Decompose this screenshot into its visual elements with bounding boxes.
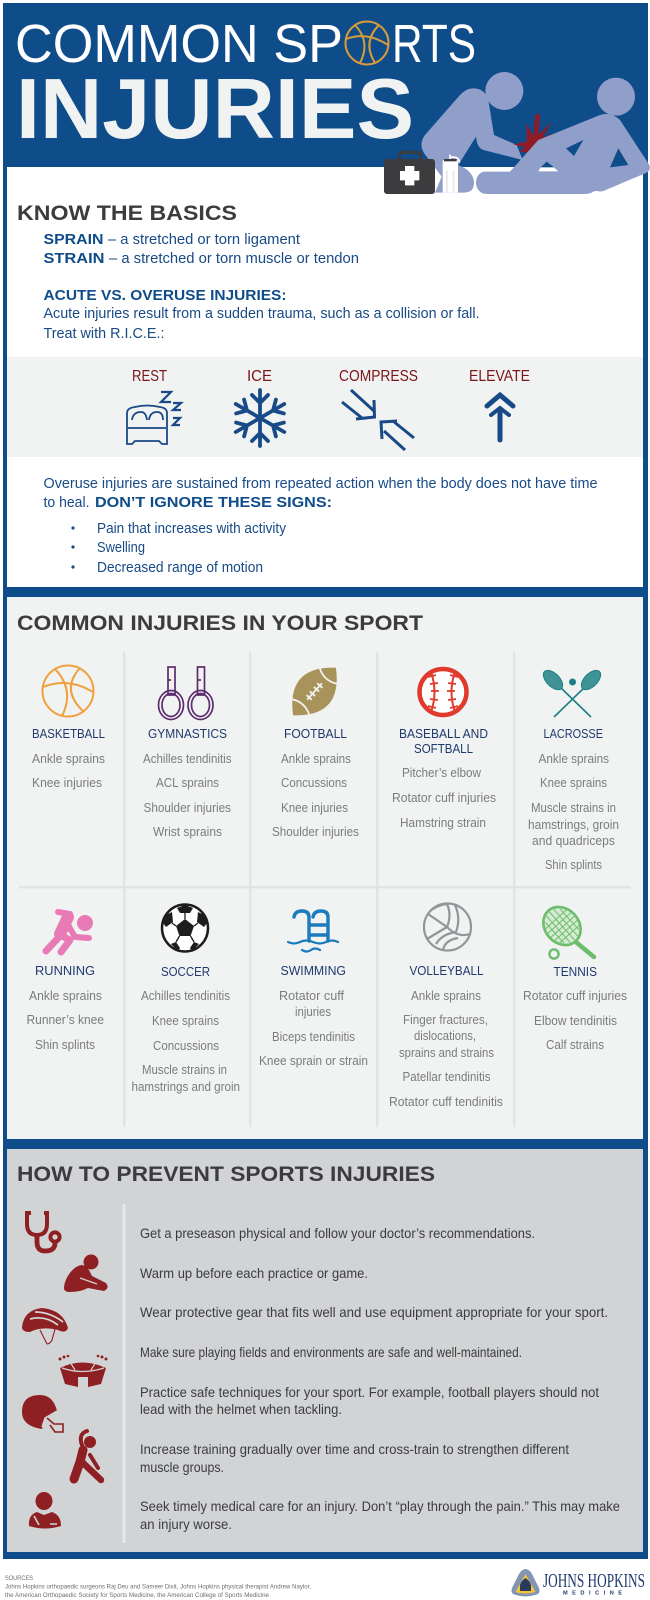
sport: swimming: SWIMMING xyxy=(280,964,346,978)
panel: how to prevent sports injuries xyxy=(7,1149,643,1552)
helper figure xyxy=(421,72,523,193)
sport: running: RUNNING xyxy=(35,964,95,978)
sport: volleyball: dislocations, xyxy=(414,1028,476,1043)
tip: physical: Get a preseason physical and follow your doctor’s recommendations. xyxy=(140,1226,535,1241)
icon: title basketball xyxy=(346,22,388,64)
panel: common injuries in your sport xyxy=(7,597,643,1139)
sport: running: Shin splints xyxy=(35,1037,95,1052)
injury splat xyxy=(513,113,554,153)
heading: know the basics: KNOW THE BASICS xyxy=(17,202,237,225)
icon: rings xyxy=(158,667,213,720)
sport: football: FOOTBALL xyxy=(284,727,347,741)
text: acute injuries: Acute injuries result from a sudden trauma, such as a collision or fall. xyxy=(44,306,480,322)
panel: R.I.C.E. band xyxy=(7,357,643,457)
icon: stethoscope xyxy=(27,1213,60,1251)
title xyxy=(15,14,476,157)
sport: football: Shoulder injuries xyxy=(272,824,359,839)
text: overuse injuries xyxy=(44,476,598,511)
sport: baseball and softball: Hamstring strain xyxy=(400,815,486,830)
sport: soccer: SOCCER xyxy=(161,965,210,979)
ice xyxy=(232,368,288,446)
tip: training: Increase training gradually over time and cross-train to strengthen different xyxy=(140,1442,569,1457)
sport: gymnastics: ACL sprains xyxy=(156,775,219,790)
sources xyxy=(5,1575,311,1599)
panel: know the basics background xyxy=(7,167,643,587)
tip: fields: Make sure playing fields and environments are safe and well-maintained. xyxy=(140,1345,522,1360)
sport: basketball xyxy=(32,666,105,790)
sport: swimming: Rotator cuff xyxy=(279,988,344,1003)
sport: lacrosse: LACROSSE xyxy=(544,727,603,741)
sport: basketball: Knee injuries xyxy=(32,775,102,790)
elevate: ELEVATE xyxy=(469,368,530,385)
ice: ICE xyxy=(247,368,272,385)
sport: baseball and softball: BASEBALL AND xyxy=(399,727,488,741)
sport: lacrosse: hamstrings, groin xyxy=(528,817,619,832)
sport: baseball and softball xyxy=(392,669,496,830)
text: acute injuries: Treat with R.I.C.E.: xyxy=(44,326,164,342)
definition: sprain: SPRAIN xyxy=(44,232,104,248)
tip: techniques: Practice safe techniques for your sport. For example, football players should not xyxy=(140,1385,599,1400)
tip: training xyxy=(140,1442,569,1475)
sport: lacrosse: Shin splints xyxy=(545,857,602,872)
sport: baseball and softball: Pitcher’s elbow xyxy=(402,765,482,780)
text: overuse injuries: to heal. xyxy=(44,495,90,511)
icon: runner xyxy=(46,912,93,952)
text: overuse injuries: Overuse injuries are sustained from repeated action when the body does not have time xyxy=(44,476,598,492)
sport: soccer: hamstrings and groin xyxy=(132,1079,240,1094)
rest xyxy=(127,368,181,444)
text: overuse injuries: DON’T IGNORE THESE SIGNS: xyxy=(95,495,332,511)
compress xyxy=(339,368,418,450)
sport: running: Runner’s knee xyxy=(26,1012,104,1027)
sport: lacrosse: and quadriceps xyxy=(532,833,615,848)
icon: football xyxy=(279,655,350,728)
sport: volleyball: VOLLEYBALL xyxy=(410,964,484,978)
sport: gymnastics: Wrist sprains xyxy=(153,824,222,839)
sport: volleyball: sprains and strains xyxy=(399,1045,494,1060)
sport: football: Knee injuries xyxy=(281,800,348,815)
tip: protective gear: Wear protective gear that fits well and use equipment appropriate for your sport. xyxy=(140,1305,608,1320)
definition: sprain: – a stretched or torn ligament xyxy=(108,232,300,248)
sport: swimming: Knee sprain or strain xyxy=(259,1053,368,1068)
sport: lacrosse: Muscle strains in xyxy=(531,800,616,815)
icon: soccer ball xyxy=(162,904,208,952)
icon: basketball xyxy=(42,666,94,716)
sport: baseball and softball: Rotator cuff injuries xyxy=(392,790,496,805)
sport: volleyball: Rotator cuff tendinitis xyxy=(389,1094,503,1109)
subheading: acute vs overuse: ACUTE VS. OVERUSE INJURIES: xyxy=(44,288,286,304)
sources: SOURCES xyxy=(5,1575,33,1582)
sport: swimming: Biceps tendinitis xyxy=(272,1029,355,1044)
definition: strain: STRAIN xyxy=(44,251,104,267)
sport: swimming xyxy=(259,911,368,1068)
icon: lacrosse sticks xyxy=(540,667,604,717)
illustration: injured athlete and helper xyxy=(384,72,650,194)
sport: soccer: Achilles tendinitis xyxy=(141,988,230,1003)
sport: soccer: Muscle strains in xyxy=(142,1062,227,1077)
sport: tennis: Calf strains xyxy=(546,1037,604,1052)
sport: lacrosse: Knee sprains xyxy=(540,775,607,790)
sport: basketball: BASKETBALL xyxy=(32,727,105,741)
icon: water bottle xyxy=(443,155,459,193)
tip: medical care xyxy=(140,1499,620,1532)
sport: volleyball xyxy=(389,904,503,1109)
tip: medical care: an injury worse. xyxy=(140,1517,232,1532)
sport: gymnastics: Shoulder injuries xyxy=(144,800,231,815)
icon: volleyball xyxy=(424,904,471,950)
sport: gymnastics: GYMNASTICS xyxy=(148,727,227,741)
icon: pool ladder xyxy=(288,911,338,952)
title: INJURIES xyxy=(16,62,414,157)
tip: training: muscle groups. xyxy=(140,1460,224,1475)
list: warning signs: Swelling xyxy=(97,540,145,556)
rest: REST xyxy=(132,368,168,385)
tip: techniques xyxy=(140,1385,599,1417)
logo: Johns Hopkins Medicine xyxy=(512,1569,645,1596)
sources: the American Orthopaedic Society for Sports Medicine, the American College of Sports Medicine xyxy=(5,1592,269,1599)
sources: Johns Hopkins orthopaedic surgeons Raj Deu and Sameer Dixit, Johns Hopkins physical therapist Andrew Naylor, xyxy=(5,1584,311,1590)
compress: COMPRESS xyxy=(339,368,418,385)
sport: lacrosse xyxy=(528,667,619,872)
title: COMMON SP xyxy=(15,14,343,74)
tip: warm up: Warm up before each practice or game. xyxy=(140,1266,368,1281)
sport: volleyball: Finger fractures, xyxy=(403,1012,488,1027)
sport: football xyxy=(272,655,359,839)
sport: tennis: Rotator cuff injuries xyxy=(523,988,627,1003)
sport: baseball and softball: SOFTBALL xyxy=(414,742,473,756)
sport: volleyball: Patellar tendinitis xyxy=(402,1069,491,1084)
elevate xyxy=(469,368,530,440)
icon: doctor xyxy=(29,1492,61,1528)
tip: techniques: lead with the helmet when tackling. xyxy=(140,1402,342,1417)
title: RTS xyxy=(392,14,476,74)
sport: running xyxy=(26,912,104,1052)
sport: tennis xyxy=(523,899,627,1052)
injured figure xyxy=(476,78,650,194)
icon: side stretch athlete xyxy=(74,1431,101,1480)
sport: football: Ankle sprains xyxy=(281,751,351,766)
list: warning signs: Decreased range of motion xyxy=(97,560,263,576)
sport: tennis: Elbow tendinitis xyxy=(534,1013,617,1028)
sport: soccer xyxy=(132,904,240,1094)
sport: soccer: Knee sprains xyxy=(152,1013,219,1028)
sport: gymnastics: Achilles tendinitis xyxy=(143,751,232,766)
icon: shield xyxy=(512,1569,540,1596)
icon: baseball xyxy=(420,669,466,715)
icon: tennis racket xyxy=(536,899,594,959)
sport: running: Ankle sprains xyxy=(29,988,102,1003)
icon: snowflake xyxy=(232,390,288,446)
icon: up arrow xyxy=(487,395,513,440)
icon: stadium xyxy=(58,1355,108,1387)
icon: cycling helmet xyxy=(22,1308,68,1344)
definition: strain: – a stretched or torn muscle or tendon xyxy=(109,251,359,267)
icon: stretching athlete xyxy=(64,1254,108,1292)
sport: volleyball: Ankle sprains xyxy=(411,988,481,1003)
sport: football: Concussions xyxy=(281,775,347,790)
logo: Johns Hopkins Medicine: MEDICINE xyxy=(563,1590,622,1596)
sport: lacrosse: Ankle sprains xyxy=(538,751,609,766)
sport: tennis: TENNIS xyxy=(554,965,597,979)
sport: swimming: injuries xyxy=(295,1004,331,1019)
tip: medical care: Seek timely medical care for an injury. Don’t “play through the pain.” This may make xyxy=(140,1499,620,1514)
icon: bed xyxy=(127,392,181,444)
sport: gymnastics xyxy=(143,667,232,839)
heading: common injuries: COMMON INJURIES IN YOUR SPORT xyxy=(17,612,423,635)
list: warning signs: Pain that increases with activity xyxy=(97,521,287,537)
icon: football helmet xyxy=(22,1395,63,1432)
icon: first aid kit xyxy=(384,152,435,194)
icon: compress arrows xyxy=(342,390,414,450)
list: warning signs xyxy=(71,521,287,576)
text: acute injuries xyxy=(44,306,480,342)
sport: soccer: Concussions xyxy=(153,1038,219,1053)
heading: prevention: HOW TO PREVENT SPORTS INJURIES xyxy=(17,1163,435,1186)
sport: basketball: Ankle sprains xyxy=(32,751,105,766)
